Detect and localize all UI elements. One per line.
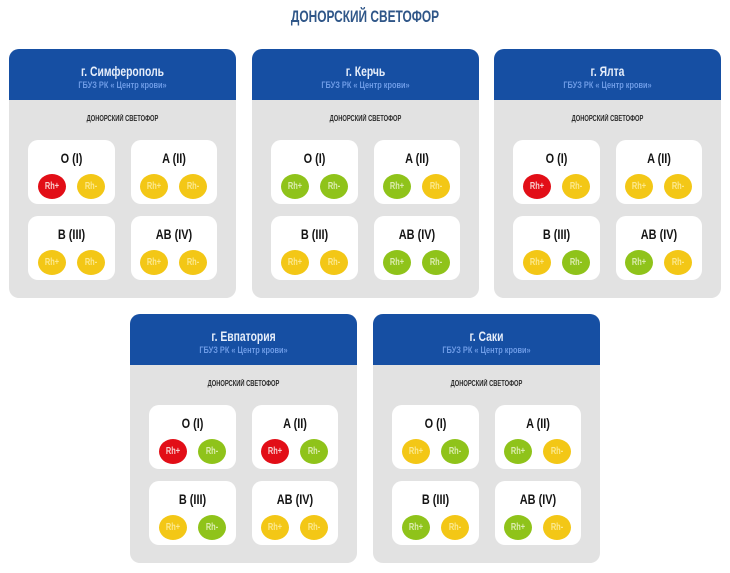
blood group AB (IV): AB (IV) (520, 491, 556, 507)
header: Евпатория: г. Евпатория (211, 328, 276, 344)
blood group AB (IV): Rh- (672, 257, 684, 268)
blood group A (II): A (II) (405, 150, 429, 166)
blood group AB (IV): Rh- (430, 257, 442, 268)
subtitle: ДОНОРСКИЙ СВЕТОФОР (572, 114, 643, 123)
blood group A (II): A (II) (647, 150, 671, 166)
blood group AB (IV) (252, 481, 338, 545)
blood group B (III): Rh- (206, 522, 218, 533)
panel: Ялта (494, 49, 721, 298)
blood group O (I): Rh+ (530, 181, 544, 192)
subtitle: ДОНОРСКИЙ СВЕТОФОР (87, 114, 158, 123)
blood group O (I): Rh+ (409, 446, 423, 457)
blood group B (III): Rh+ (45, 257, 59, 268)
blood group AB (IV): Rh- (187, 257, 199, 268)
blood group A (II): Rh- (187, 181, 199, 192)
blood group AB (IV): Rh+ (147, 257, 161, 268)
header: Керчь: г. Керчь (346, 63, 385, 79)
blood group B (III) (271, 216, 358, 280)
blood group O (I): O (I) (546, 150, 567, 166)
blood group AB (IV): Rh+ (632, 257, 646, 268)
blood group A (II) (374, 140, 460, 204)
panel: Симферополь (9, 49, 236, 298)
blood group B (III): Rh- (570, 257, 582, 268)
panel: Саки (373, 314, 600, 563)
blood group O (I): Rh- (206, 446, 218, 457)
blood group AB (IV) (495, 481, 581, 545)
blood group B (III): Rh+ (166, 522, 180, 533)
header: Ялта: г. Ялта (591, 63, 624, 79)
header: Ялта (494, 49, 721, 100)
blood group O (I): Rh- (570, 181, 582, 192)
blood group O (I): Rh+ (45, 181, 59, 192)
blood group A (II): A (II) (526, 415, 550, 431)
blood group O (I): O (I) (425, 415, 446, 431)
blood group B (III): B (III) (58, 226, 85, 242)
blood group B (III) (392, 481, 479, 545)
blood group A (II): Rh+ (390, 181, 404, 192)
blood group O (I) (271, 140, 358, 204)
subtitle: ДОНОРСКИЙ СВЕТОФОР (330, 114, 401, 123)
blood group AB (IV): AB (IV) (399, 226, 435, 242)
title: ДОНОРСКИЙ СВЕТОФОР (291, 7, 439, 26)
blood group AB (IV): AB (IV) (641, 226, 677, 242)
blood group AB (IV): Rh- (308, 522, 320, 533)
blood group O (I): Rh- (449, 446, 461, 457)
blood group O (I) (513, 140, 600, 204)
blood group O (I): O (I) (61, 150, 82, 166)
blood group AB (IV): Rh+ (390, 257, 404, 268)
header: Ялта: ГБУЗ РК « Центр крови» (563, 80, 652, 90)
header: Саки: ГБУЗ РК « Центр крови» (442, 345, 531, 355)
blood group A (II): A (II) (283, 415, 307, 431)
blood group AB (IV): Rh- (551, 522, 563, 533)
blood group A (II): Rh+ (147, 181, 161, 192)
blood group A (II) (495, 405, 581, 469)
blood group A (II): Rh+ (632, 181, 646, 192)
subtitle: ДОНОРСКИЙ СВЕТОФОР (208, 379, 279, 388)
blood group AB (IV) (374, 216, 460, 280)
header: Саки: г. Саки (470, 328, 503, 344)
blood group O (I): O (I) (304, 150, 325, 166)
blood group O (I) (149, 405, 236, 469)
blood group A (II): Rh- (308, 446, 320, 457)
blood group B (III): Rh- (85, 257, 97, 268)
blood group A (II): Rh+ (511, 446, 525, 457)
header: Керчь: ГБУЗ РК « Центр крови» (321, 80, 410, 90)
blood group O (I): Rh+ (166, 446, 180, 457)
blood group B (III): Rh+ (288, 257, 302, 268)
blood group B (III): B (III) (179, 491, 206, 507)
blood group B (III): B (III) (301, 226, 328, 242)
blood group B (III): Rh- (449, 522, 461, 533)
blood group AB (IV) (616, 216, 702, 280)
blood group O (I): Rh- (328, 181, 340, 192)
blood group A (II): A (II) (162, 150, 186, 166)
blood group AB (IV): AB (IV) (156, 226, 192, 242)
blood group B (III) (513, 216, 600, 280)
header: Саки (373, 314, 600, 365)
blood group AB (IV): Rh+ (268, 522, 282, 533)
blood group A (II) (131, 140, 217, 204)
blood group A (II): Rh+ (268, 446, 282, 457)
blood group B (III): Rh- (328, 257, 340, 268)
blood group A (II): Rh- (551, 446, 563, 457)
blood group A (II) (616, 140, 702, 204)
header: Керчь (252, 49, 479, 100)
blood group B (III): B (III) (543, 226, 570, 242)
blood group B (III): B (III) (422, 491, 449, 507)
blood group O (I): Rh- (85, 181, 97, 192)
blood group A (II) (252, 405, 338, 469)
header: Симферополь: г. Симферополь (81, 63, 164, 79)
header: Евпатория: ГБУЗ РК « Центр крови» (199, 345, 288, 355)
blood group A (II): Rh- (430, 181, 442, 192)
blood group A (II): Rh- (672, 181, 684, 192)
blood group B (III) (149, 481, 236, 545)
blood group AB (IV): Rh+ (511, 522, 525, 533)
header: Симферополь (9, 49, 236, 100)
blood group O (I): Rh+ (288, 181, 302, 192)
blood group AB (IV): AB (IV) (277, 491, 313, 507)
header: Симферополь: ГБУЗ РК « Центр крови» (78, 80, 167, 90)
blood group O (I) (28, 140, 115, 204)
blood group AB (IV) (131, 216, 217, 280)
subtitle: ДОНОРСКИЙ СВЕТОФОР (451, 379, 522, 388)
panel: Евпатория (130, 314, 357, 563)
blood group B (III): Rh+ (409, 522, 423, 533)
header: Евпатория (130, 314, 357, 365)
panel: Керчь (252, 49, 479, 298)
blood group O (I): O (I) (182, 415, 203, 431)
blood group B (III): Rh+ (530, 257, 544, 268)
blood group O (I) (392, 405, 479, 469)
blood group B (III) (28, 216, 115, 280)
